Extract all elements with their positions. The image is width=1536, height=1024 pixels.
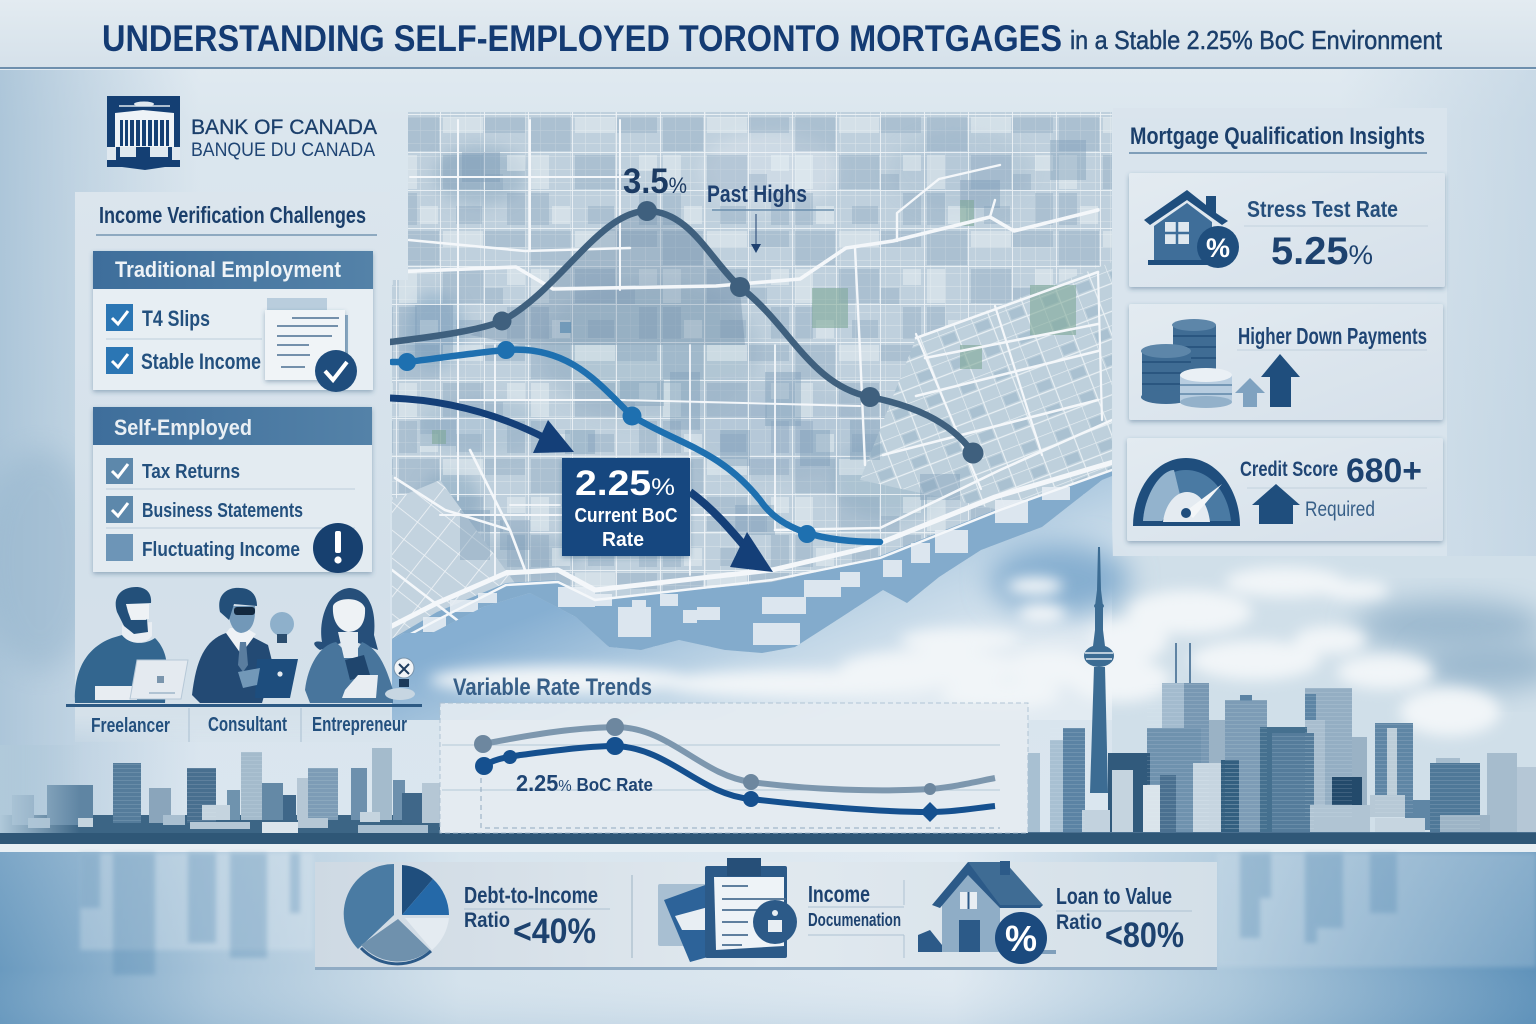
heading: Mortgage Qualification Insights	[1130, 123, 1425, 150]
checkbox: tax returns	[106, 458, 240, 484]
text: loan to value ratio: Loan to Value	[1056, 883, 1172, 909]
text: debt-to-income ratio: <40%	[513, 912, 596, 951]
icon: house with percent	[1144, 190, 1239, 268]
card: stress test	[1129, 173, 1445, 287]
label: entrepreneur: Entrepreneur	[312, 714, 407, 736]
heading: variable rate trends: Variable Rate Trends	[453, 674, 652, 701]
card: higher down payments: Higher Down Payments	[1238, 323, 1427, 349]
icon: CN tower	[1084, 547, 1114, 793]
card: credit score: Required	[1305, 498, 1375, 521]
icon: warning	[313, 523, 363, 573]
subtitle: in a Stable 2.25% BoC Environment	[1070, 25, 1443, 55]
icon: clipboard	[658, 858, 797, 962]
label: freelancer: Freelancer	[91, 715, 170, 737]
people row	[66, 587, 422, 742]
past rate curve	[390, 201, 984, 464]
checkbox: stable income: Stable Income	[141, 349, 261, 374]
card: stress test: Stress Test Rate	[1247, 196, 1398, 222]
window stripes	[113, 683, 1480, 838]
figure: consultant	[192, 588, 298, 703]
lake	[392, 460, 1536, 846]
heading: Income Verification Challenges	[99, 202, 366, 228]
card: stress test: 5.25%	[1271, 230, 1373, 273]
roads	[390, 120, 1120, 645]
checkbox: T4 slips	[106, 304, 210, 331]
card: self-employed: Self-Employed	[114, 415, 252, 440]
block texture	[392, 117, 1112, 591]
checkbox: stable income	[106, 347, 261, 374]
label: consultant: Consultant	[208, 714, 287, 736]
arrow: continuing lower	[690, 492, 773, 572]
checkbox: T4 slips: T4 Slips	[142, 306, 210, 331]
text: debt-to-income ratio	[464, 882, 610, 951]
card: credit score	[1127, 438, 1443, 541]
icon: small house	[1252, 484, 1300, 524]
card: credit score: Credit Score	[1240, 458, 1338, 481]
checkbox: fluctuating income	[106, 534, 300, 561]
logo: Bank of Canada: BANQUE DU CANADA	[191, 140, 375, 161]
card: traditional employment: Traditional Employment	[115, 257, 342, 282]
icon: coins and arrows	[1141, 319, 1300, 408]
callout: current BoC rate: Rate	[602, 529, 644, 551]
current rate curve	[392, 341, 880, 543]
icon: house with percent: %	[1005, 918, 1037, 959]
panel: key ratios	[315, 858, 1217, 970]
callout: current BoC rate	[562, 458, 690, 556]
text: loan to value ratio: Ratio	[1056, 911, 1102, 934]
chart: variable rate trends	[440, 703, 1028, 833]
rate curves	[390, 201, 984, 572]
area under peak	[470, 211, 745, 345]
series: grey line	[474, 718, 995, 795]
checkbox: business statements: Business Statements	[142, 500, 303, 522]
logo: Bank of Canada	[107, 96, 377, 170]
arrow: decline to current rate	[390, 398, 574, 453]
figure: freelancer	[75, 587, 188, 703]
text: debt-to-income ratio: Debt-to-Income	[464, 882, 598, 908]
card: credit score: 680+	[1346, 452, 1422, 490]
water with reflections	[0, 844, 1536, 1024]
skyline	[0, 547, 1536, 845]
card: self-employed	[93, 407, 372, 573]
checkbox: tax returns: Tax Returns	[142, 461, 240, 483]
text: loan to value ratio	[1056, 883, 1192, 955]
sky and clouds	[430, 544, 1536, 846]
label: 2.25% BoC rate: 2.25% BoC Rate	[516, 770, 653, 796]
icon: pie chart	[344, 864, 449, 964]
callout: current BoC rate: Current BoC	[574, 505, 678, 527]
logo: Bank of Canada: BANK OF CANADA	[191, 116, 377, 139]
text: loan to value ratio: <80%	[1105, 916, 1184, 955]
text: income documentation: Income	[808, 881, 870, 907]
panel: income verification challenges	[75, 192, 390, 742]
text: income documentation	[808, 880, 904, 958]
panel: mortgage qualification insights	[1113, 108, 1447, 556]
callout: current BoC rate: 2.25 %	[575, 464, 675, 503]
parks	[432, 200, 1076, 444]
shore buildings	[423, 487, 1070, 645]
label: past highs: Past Highs	[707, 181, 807, 208]
icon: documents	[265, 298, 357, 392]
low-frequency tone	[405, 130, 1030, 575]
skyline right	[113, 643, 1536, 838]
title banner	[0, 0, 1536, 69]
icon: house with percent: %	[1206, 233, 1230, 263]
icon: bank building	[107, 96, 180, 170]
skyline left	[0, 745, 440, 845]
checkbox: business statements	[106, 496, 303, 523]
map of Toronto	[390, 110, 1120, 660]
card: traditional employment	[93, 251, 373, 392]
label: past highs	[707, 181, 834, 253]
label: 3.5%: 3.5%	[623, 162, 687, 201]
icon: credit gauge	[1133, 458, 1240, 526]
series: blue line	[475, 737, 995, 822]
card: higher down payments	[1129, 304, 1443, 420]
shoreline	[0, 833, 1536, 844]
text: income documentation: Documenation	[808, 910, 901, 930]
title: UNDERSTANDING SELF-EMPLOYED TORONTO MORTGAGES	[102, 18, 1062, 59]
figure: entrepreneur	[305, 588, 415, 703]
checkbox: fluctuating income: Fluctuating Income	[142, 539, 300, 561]
icon: house with percent	[918, 861, 1056, 964]
map blocks	[415, 140, 1086, 560]
text: debt-to-income ratio: Ratio	[464, 909, 510, 932]
land along lake shadow	[390, 470, 1112, 660]
